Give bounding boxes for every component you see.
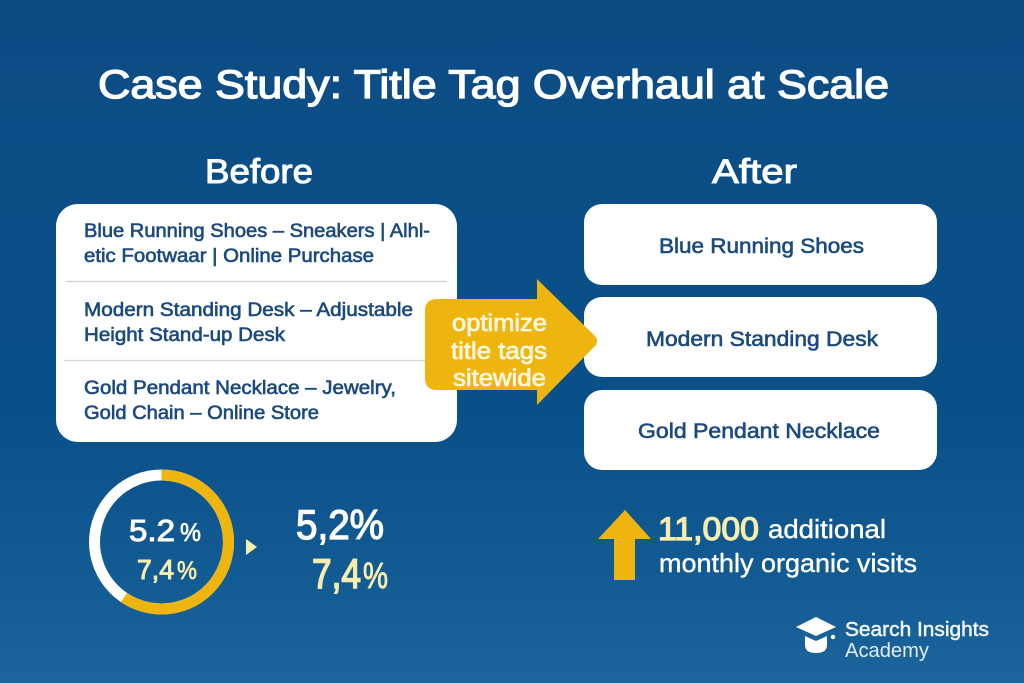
text: shoes title: Blue Running Shoes – Sneakers | Alhl-: [84, 221, 430, 242]
icon: graduation cap: [796, 617, 836, 653]
text: desk title: Height Stand-up Desk: [84, 325, 286, 346]
panel: after desk: [584, 297, 937, 377]
logo: search insights academy: [796, 617, 989, 662]
title: Case Study: Title Tag Overhaul at Scale: [98, 63, 889, 107]
text: desk title: [84, 300, 413, 346]
ring chart: conversion rate: %: [177, 557, 197, 585]
text: necklace title: Gold Chain – Online Store: [84, 403, 319, 424]
arrow: optimize title tags sitewide: optimize: [452, 310, 547, 337]
panel: before title tags: [56, 204, 457, 442]
heading: before: Before: [205, 153, 313, 191]
ring chart: conversion rate: 7,4: [137, 554, 174, 585]
text: shoes title: [84, 221, 430, 267]
panel: after necklace: Gold Pendant Necklace: [638, 420, 880, 443]
stat: additional visits: 11,000: [658, 511, 759, 547]
icon: small triangle arrow: [246, 539, 257, 555]
text: desk title: Modern Standing Desk – Adjustable: [84, 300, 413, 321]
stat: additional visits: [658, 511, 917, 578]
stat: conversion values: %: [363, 555, 388, 596]
arrow: optimize title tags sitewide: title tags: [451, 338, 547, 365]
stat: additional visits: additional: [768, 514, 886, 544]
stat: conversion values: 5,2%: [296, 501, 384, 548]
text: shoes title: etic Footwaar | Online Purchase: [84, 246, 374, 267]
stat: conversion values: 7,4: [312, 550, 361, 597]
arrow: optimize title tags sitewide: sitewide: [453, 365, 546, 392]
heading: after: After: [712, 153, 797, 191]
arrow: optimize title tags sitewide: [425, 279, 597, 405]
ring chart: conversion rate: %: [180, 519, 201, 547]
logo: search insights academy: Search Insights: [845, 619, 989, 641]
ring chart: conversion rate: 5.2: [129, 513, 175, 548]
icon: up arrow: [598, 510, 651, 580]
text: necklace title: Gold Pendant Necklace – Jewelry,: [84, 378, 396, 399]
logo: search insights academy: Academy: [845, 640, 929, 662]
panel: after desk: Modern Standing Desk: [646, 328, 879, 351]
panel: after shoes: Blue Running Shoes: [659, 235, 864, 258]
panel: after shoes: [584, 204, 937, 285]
text: necklace title: [84, 378, 396, 424]
stat: conversion values: [296, 501, 388, 597]
stat: additional visits: monthly organic visits: [659, 548, 917, 578]
panel: after necklace: [584, 390, 937, 470]
ring chart: conversion rate: [94, 475, 229, 609]
